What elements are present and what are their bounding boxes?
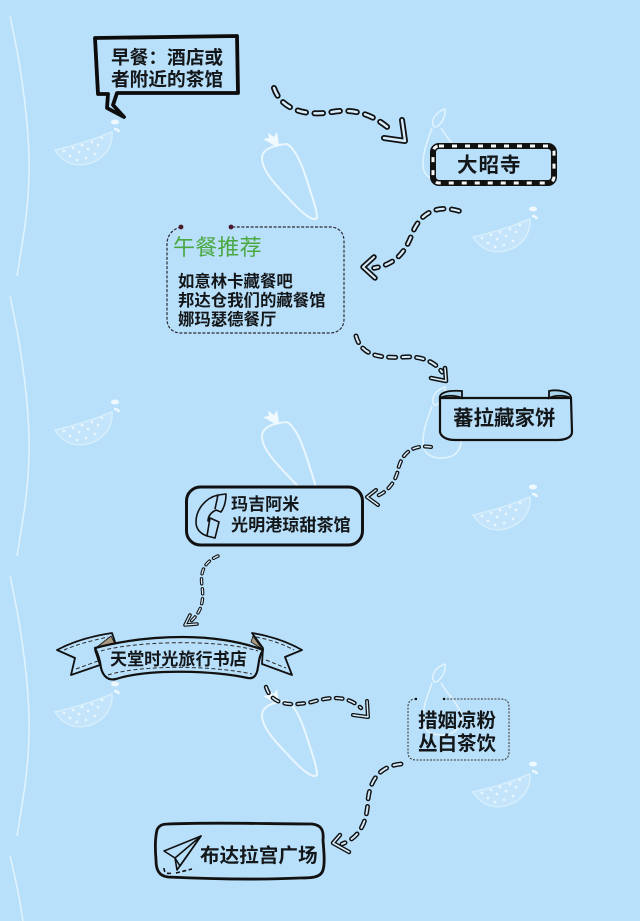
restaurant list: 娜玛瑟德餐厅 bbox=[178, 310, 276, 329]
heading: lunch: 午餐推荐 bbox=[173, 235, 262, 260]
restaurant list: 如意林卡藏餐吧 bbox=[178, 272, 293, 291]
panel: cold noodles and sweet tea: 丛白茶饮 bbox=[418, 733, 497, 755]
arrow: Jokhang to lunch bbox=[363, 209, 459, 278]
panel: lunch recommendations bbox=[167, 225, 344, 333]
panel: Makye Ame: 光明港琼甜茶馆 bbox=[231, 515, 351, 535]
restaurant list bbox=[178, 272, 326, 329]
arrow: noodles to Potala Square bbox=[333, 764, 401, 852]
arrow: Makye Ame to bookshop bbox=[185, 556, 218, 625]
arrow: lunch to pancake bbox=[356, 336, 446, 381]
panel: cold noodles and sweet tea bbox=[408, 698, 509, 760]
arrow: bookshop to noodles bbox=[266, 687, 368, 717]
ribbon banner: bookshop bbox=[57, 633, 302, 679]
panel: Potala Palace Square bbox=[155, 823, 324, 879]
icon: telephone bbox=[196, 494, 226, 538]
panel: scroll banner: 蕃拉藏家饼 bbox=[453, 406, 556, 430]
panel: Jokhang Temple: 大昭寺 bbox=[457, 154, 522, 177]
callout: breakfast: 者附近的茶馆 bbox=[111, 69, 223, 90]
panel: scroll banner bbox=[440, 390, 572, 440]
callout: breakfast bbox=[95, 36, 238, 117]
panel: Makye Ame bbox=[186, 487, 362, 545]
ribbon banner: bookshop: 天堂时光旅行书店 bbox=[110, 650, 247, 669]
callout: breakfast: 早餐：酒店或 bbox=[111, 47, 223, 68]
restaurant list: 邦达仓我们的藏餐馆 bbox=[178, 291, 326, 310]
arrow: breakfast to Jokhang bbox=[274, 88, 405, 141]
panel: cold noodles and sweet tea: 措姻凉粉 bbox=[418, 710, 497, 732]
icon: paper plane bbox=[164, 836, 201, 873]
panel: Jokhang Temple bbox=[433, 146, 554, 183]
panel: Potala Palace Square: 布达拉宫广场 bbox=[200, 844, 318, 867]
panel: Makye Ame: 玛吉阿米 bbox=[231, 495, 299, 514]
arrow: pancake to Makye Ame bbox=[367, 447, 431, 505]
